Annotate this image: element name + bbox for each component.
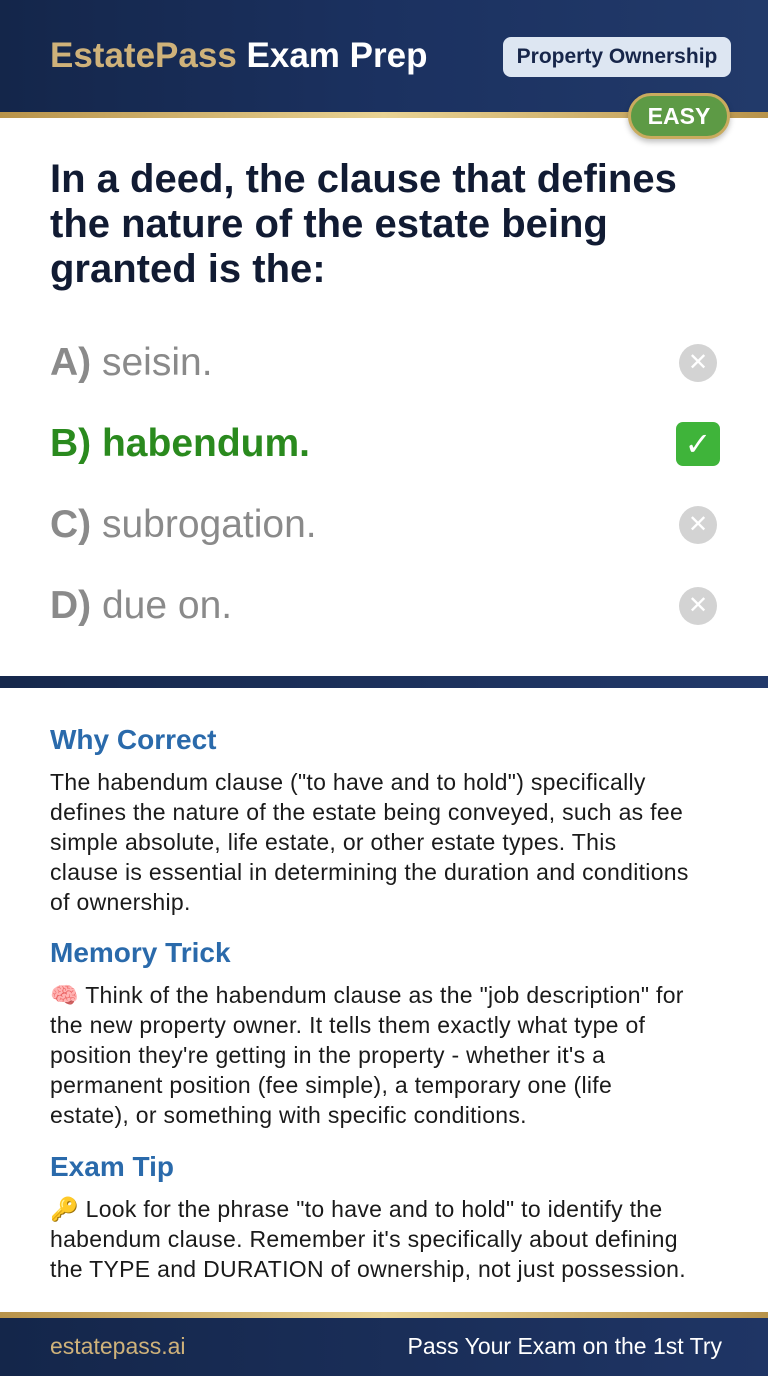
footer bbox=[0, 1318, 768, 1376]
icon: check: ✓ bbox=[685, 426, 711, 462]
section: memory trick: 🧠 Think of the habendum clause as the "job description" for bbox=[50, 982, 684, 1008]
icon: check bbox=[676, 422, 720, 466]
icon: x A: ✕ bbox=[688, 349, 708, 376]
difficulty badge: EASY bbox=[648, 103, 710, 129]
footer url: estatepass.ai bbox=[50, 1333, 186, 1359]
section: why correct: clause is essential in determining the duration and conditions bbox=[50, 859, 689, 885]
section: why correct: simple absolute, life estate, or other estate types. This bbox=[50, 829, 616, 855]
icon: x C bbox=[679, 506, 717, 544]
section: why correct: Why Correct bbox=[50, 724, 216, 755]
option C: C) subrogation. bbox=[50, 503, 317, 546]
brand title: EstatePass Exam Prep bbox=[50, 36, 427, 75]
question: In a deed, the clause that defines the nature of the estate being granted is the: bbox=[50, 157, 677, 291]
section: exam tip: Exam Tip bbox=[50, 1151, 174, 1182]
divider band bbox=[0, 676, 768, 688]
section: memory trick: permanent position (fee simple), a temporary one (life bbox=[50, 1072, 612, 1098]
section: memory trick: Memory Trick bbox=[50, 937, 231, 968]
section: why correct: of ownership. bbox=[50, 889, 191, 915]
option A: A) seisin. bbox=[50, 341, 213, 384]
section: exam tip: habendum clause. Remember it's specifically about defining bbox=[50, 1226, 678, 1252]
category tag bbox=[503, 37, 731, 77]
section: why correct bbox=[50, 724, 689, 915]
section: memory trick bbox=[50, 937, 684, 1128]
section: exam tip: 🔑 Look for the phrase "to have and to hold" to identify the bbox=[50, 1196, 662, 1222]
icon: x A bbox=[679, 344, 717, 382]
difficulty badge bbox=[628, 93, 730, 139]
icon: x D bbox=[679, 587, 717, 625]
section: exam tip bbox=[50, 1151, 686, 1282]
icon: x C: ✕ bbox=[688, 511, 708, 538]
section: memory trick: estate), or something with specific conditions. bbox=[50, 1102, 527, 1128]
section: why correct: defines the nature of the estate being conveyed, such as fee bbox=[50, 799, 683, 825]
section: exam tip: the TYPE and DURATION of ownership, not just possession. bbox=[50, 1256, 686, 1282]
category tag: Property Ownership bbox=[517, 45, 717, 68]
section: memory trick: position they're getting in the property - whether it's a bbox=[50, 1042, 605, 1068]
option D: D) due on. bbox=[50, 584, 232, 627]
footer tagline: Pass Your Exam on the 1st Try bbox=[408, 1333, 722, 1359]
header bar bbox=[0, 0, 768, 113]
section: memory trick: the new property owner. It tells them exactly what type of bbox=[50, 1012, 645, 1038]
option B (correct): B) habendum. bbox=[50, 422, 310, 465]
section: why correct: The habendum clause ("to have and to hold") specifically bbox=[50, 769, 646, 795]
icon: x D: ✕ bbox=[688, 592, 708, 619]
